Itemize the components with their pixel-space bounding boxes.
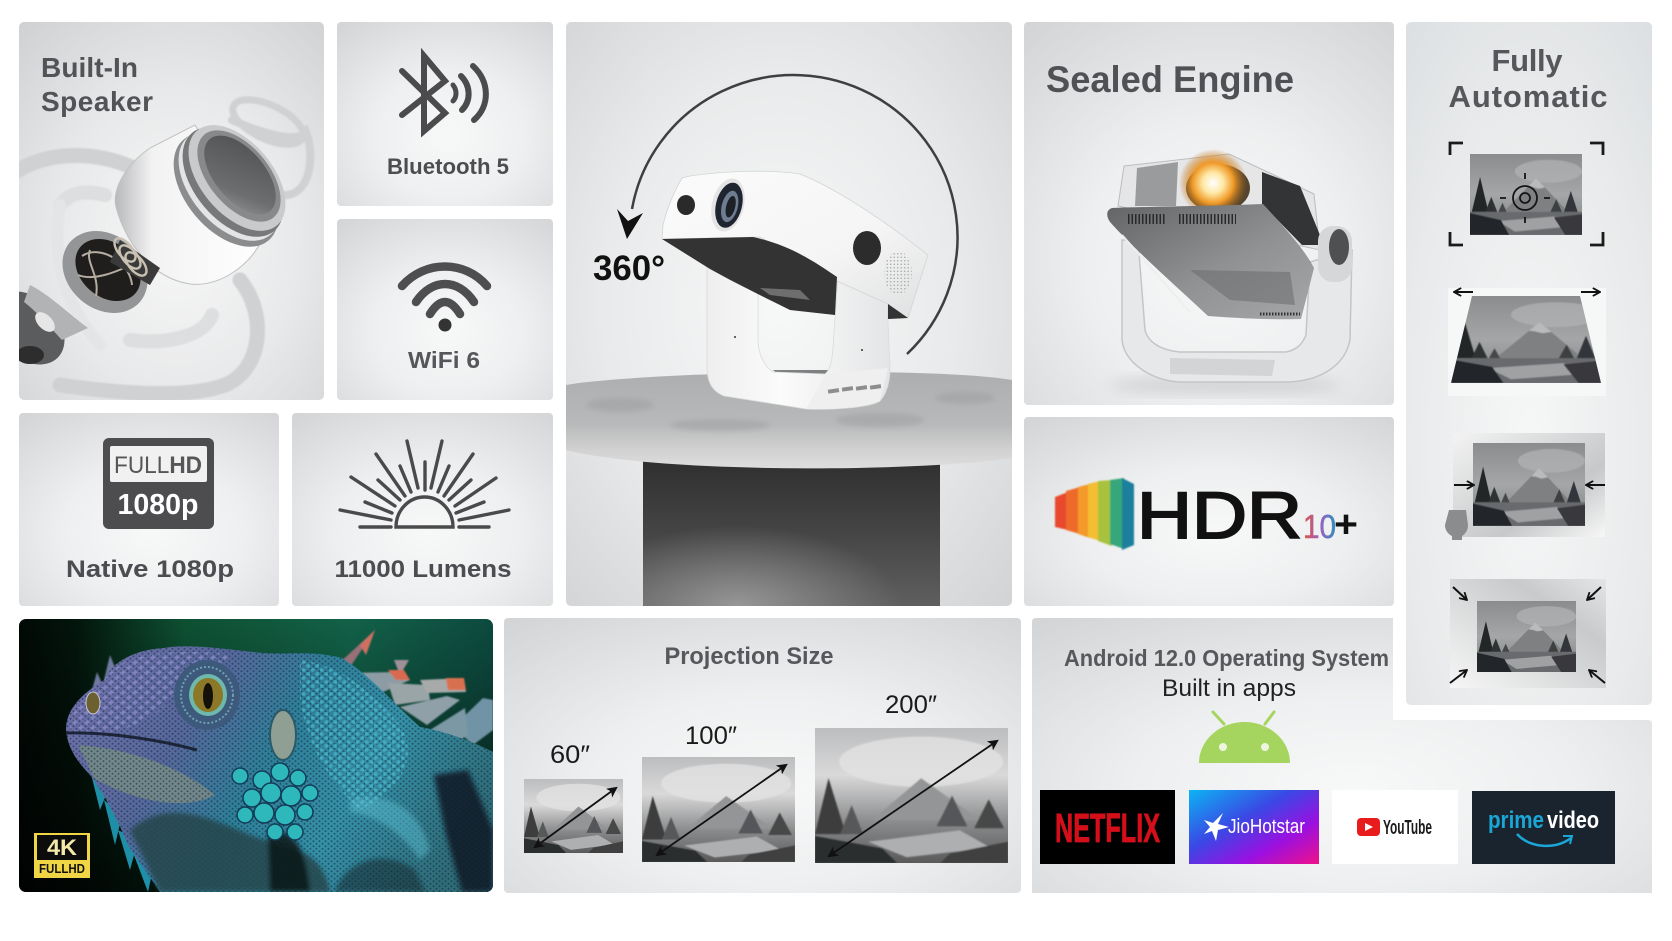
panel: android apps [1032,618,1652,893]
logo: jiohotstar [1189,790,1319,864]
icon: android head [1199,712,1290,763]
subheading: built in apps: Built in apps [1162,675,1296,702]
panel: wifi [337,219,553,400]
iguana throat spikes [92,777,151,892]
icon: sun rays [340,441,509,527]
icon: wifi [402,266,487,332]
label: 11000 lumens: 11000 Lumens [334,556,512,583]
panel: hdr10+ [1024,417,1394,606]
screen: 100 inch: 100″ [685,722,737,750]
pedestal [643,460,940,606]
panel: bluetooth [337,22,553,206]
screen: 60 inch: 60″ [550,741,590,769]
logo: prime video: prime [1488,807,1544,834]
screen: 100 inch [642,722,795,862]
heading: sealed engine: Sealed Engine [1046,59,1294,100]
label: bluetooth 5: Bluetooth 5 [387,154,509,179]
obstacle avoidance thumbnail [1445,433,1605,540]
screen: 200 inch [815,691,1008,863]
icon: full hd badge: FULLHD [114,452,202,479]
iguana body [66,646,493,892]
logo: hdr10+: HDR [1137,478,1302,552]
4k full hd badge: 4K [47,835,77,860]
rotation arrow [617,75,958,354]
screen: 200 inch: 200″ [885,691,937,719]
heading: android os: Android 12.0 Operating System [1064,645,1389,671]
lens [706,175,750,235]
projector on stand [662,171,928,409]
heading: projection size: Projection Size [664,643,834,670]
transparent projector [1107,149,1352,395]
panel: fully automatic [1406,22,1652,705]
icon: bluetooth signal [402,56,486,131]
4k full hd badge: FULLHD [39,862,85,876]
panel: native 1080p [19,413,279,606]
iguana head plates [70,652,231,735]
heading: built-in speaker: Built-In [41,52,138,83]
heading: fully automatic: Automatic [1448,79,1608,114]
logo: jiohotstar: JioHotstar [1228,816,1305,838]
heading: fully automatic: Fully [1492,43,1563,78]
logo: hdr10+ [1055,478,1358,552]
panel: 360 degree rotation [566,22,1012,606]
keystone thumbnail [1448,288,1606,396]
panel: sealed engine [1024,22,1394,405]
label: wifi 6: WiFi 6 [408,347,480,373]
4k full hd badge [34,833,90,878]
iguana eye [174,660,240,730]
panel: 4k iguana image [19,619,493,892]
iguana dewlap scales [232,763,318,840]
panel: 11000 lumens [292,413,553,606]
label: native 1080p: Native 1080p [66,556,234,583]
heading: built-in speaker: Speaker [41,86,153,117]
iguana neck scales [300,660,408,810]
logo: prime video: video [1547,807,1599,834]
iguana spines [92,630,493,750]
logo: prime video [1472,791,1615,864]
screen: 60 inch [524,741,623,853]
screen fit thumbnail [1450,579,1606,688]
autofocus thumbnail [1450,143,1603,245]
panel: built-in speaker [0,22,324,400]
logo: hdr10+: + [1334,504,1358,546]
label: 360 degrees: 360° [593,249,665,288]
logo: hdr10+: 10 [1303,508,1336,545]
marble table top [566,372,1012,468]
logo: youtube [1332,790,1458,864]
logo: youtube: YouTube [1383,817,1432,839]
icon: full hd badge [103,438,214,529]
panel: projection size [504,618,1021,893]
icon: full hd badge: 1080p [118,489,198,521]
logo: netflix [1040,790,1175,864]
logo: netflix: NETFLIX [1055,805,1160,851]
icon: speaker driver exploded view [0,91,310,394]
